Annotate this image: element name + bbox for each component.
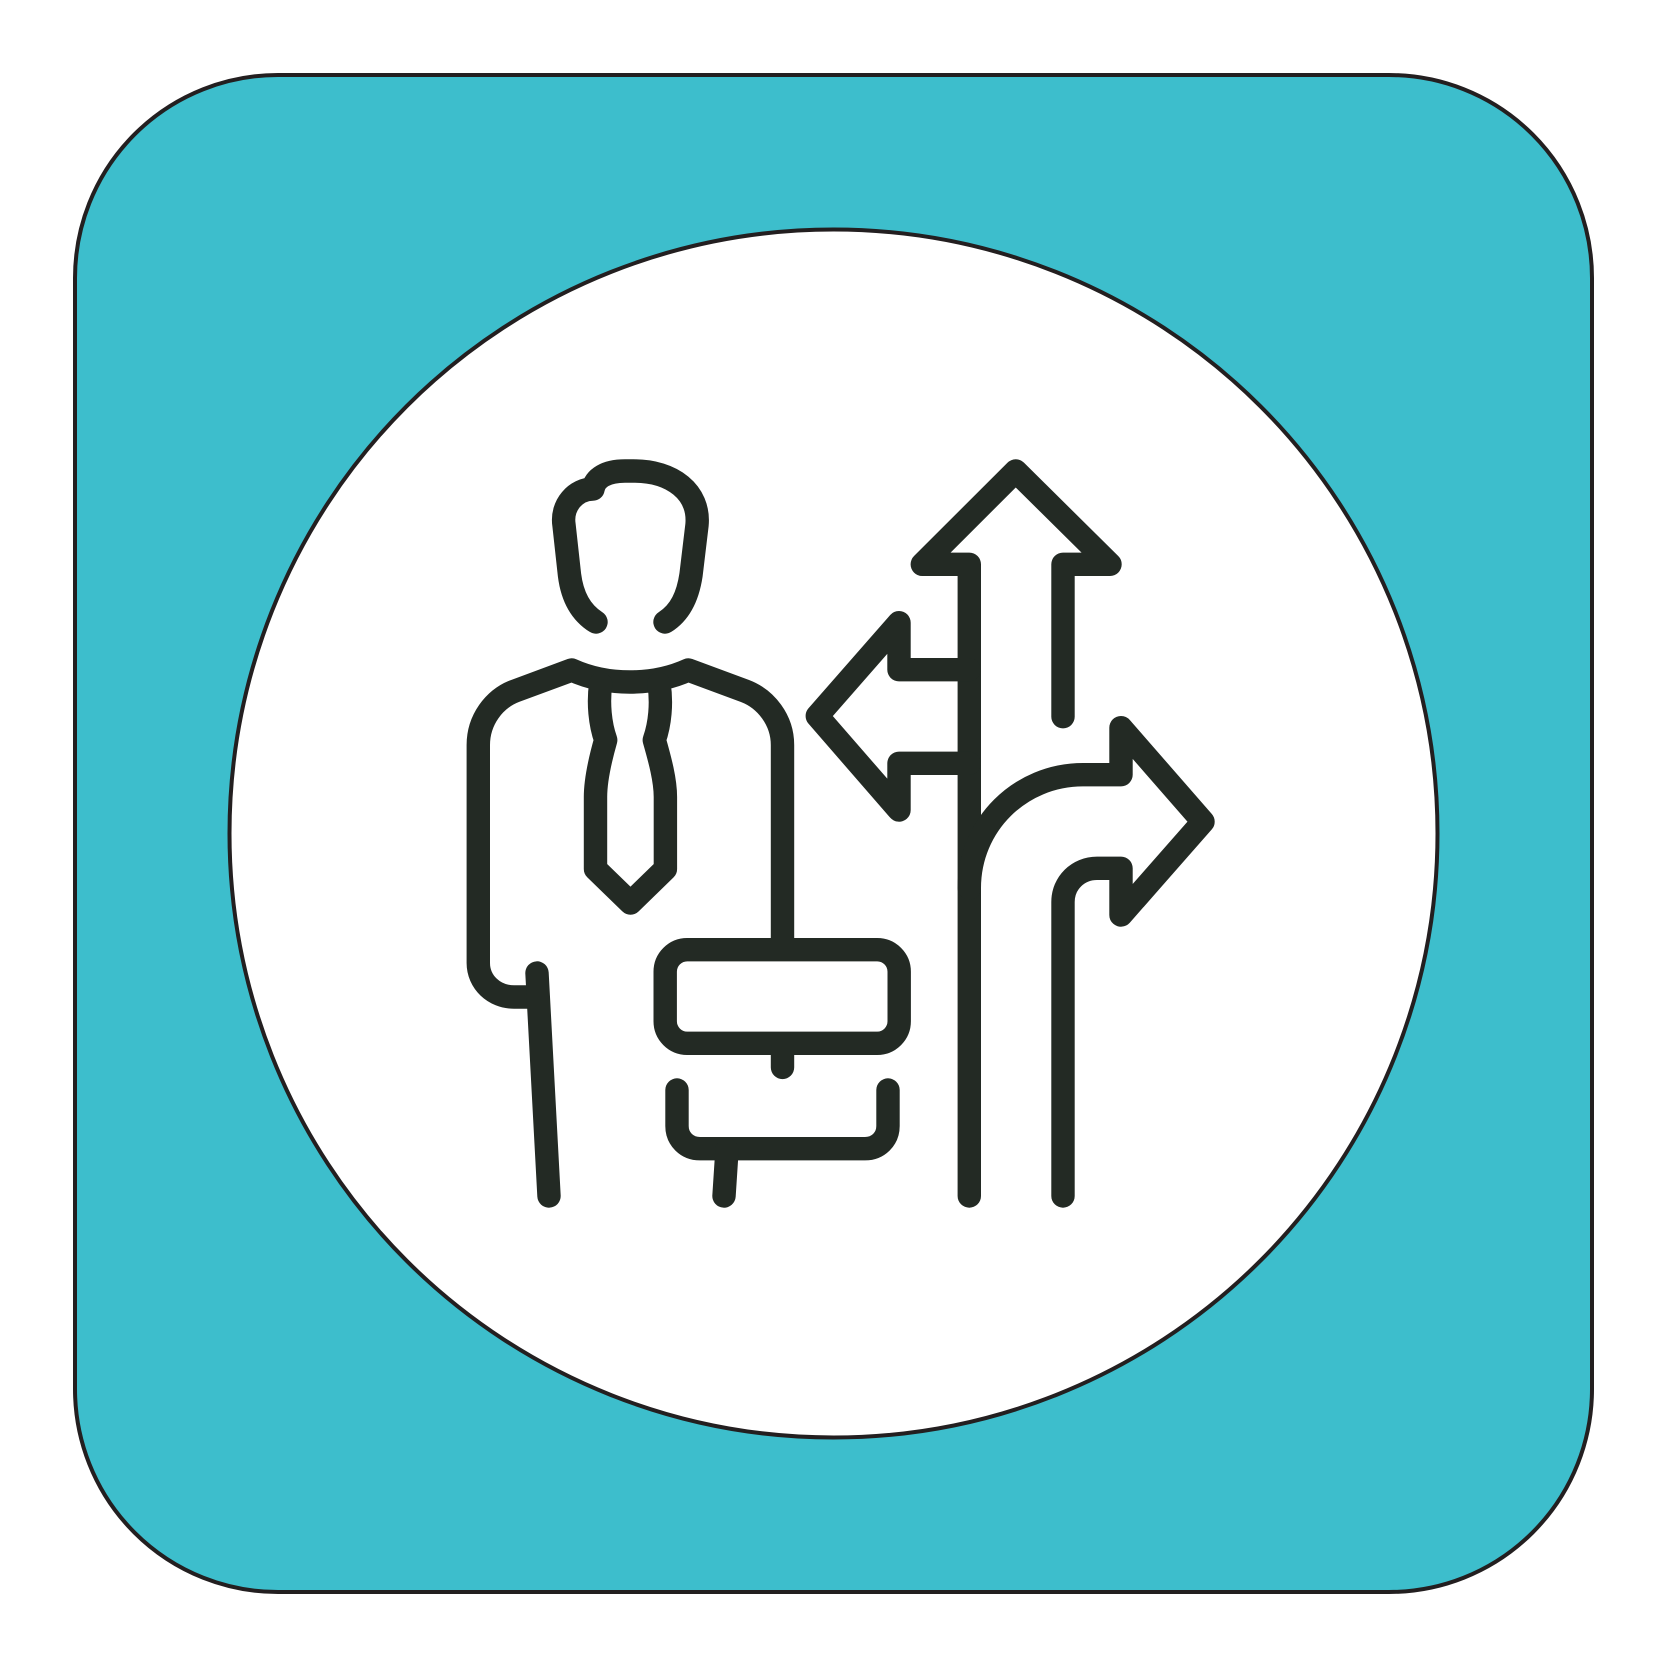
icon: briefcase divider stub <box>771 1050 794 1067</box>
icon: necktie <box>596 684 665 903</box>
icon: briefcase lower tray <box>677 1090 888 1149</box>
icon: briefcase upper body <box>665 950 899 1043</box>
arrow: left-pointing arrow <box>817 623 969 810</box>
icon: man's leg line <box>724 1150 727 1196</box>
panel: white circle <box>230 230 1438 1438</box>
icon: man's head and hair <box>564 471 697 622</box>
arrow: right-curving arrow <box>969 728 1203 1196</box>
icon: walking cane <box>537 973 549 1196</box>
arrow: upward arrow and main road line <box>922 471 1110 1196</box>
icon: suit shoulders, collar and arms <box>478 670 782 997</box>
icon: businessman with crossroads arrows <box>478 471 1203 1196</box>
